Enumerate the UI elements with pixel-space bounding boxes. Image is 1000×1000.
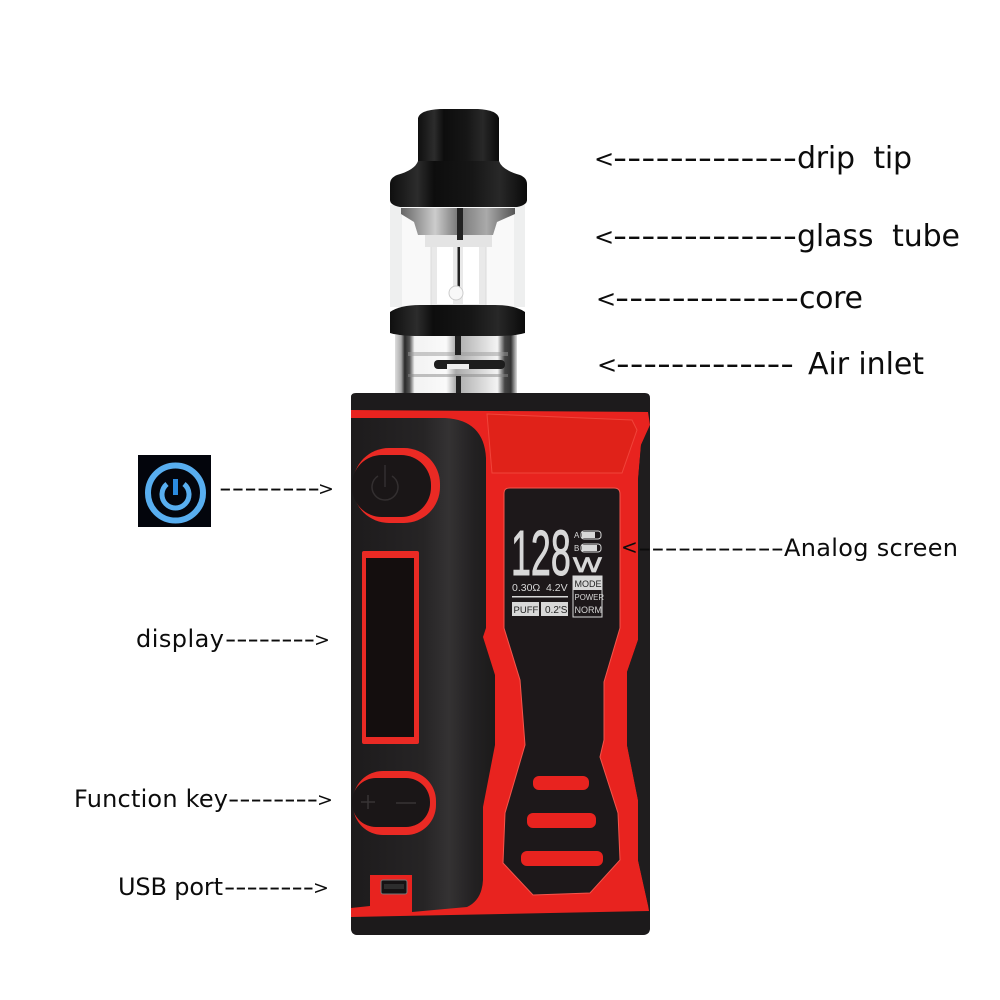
vent bar 3 bbox=[521, 851, 603, 866]
glass tube bbox=[390, 205, 525, 307]
ohm value: 0.30Ω bbox=[512, 582, 540, 594]
analog screen readout bbox=[511, 517, 604, 617]
USB port bbox=[381, 880, 407, 894]
label: USB port: > bbox=[313, 877, 329, 899]
air inlet metal base bbox=[395, 335, 517, 393]
label: display bbox=[136, 625, 330, 653]
label: core bbox=[596, 281, 863, 316]
label: glass tube: < bbox=[594, 223, 614, 251]
right black side strip bbox=[627, 425, 650, 905]
label: glass tube: ------------- bbox=[613, 219, 797, 254]
drip tip bbox=[418, 109, 499, 162]
label: air inlet: < bbox=[597, 351, 617, 379]
label: function key: -------- bbox=[228, 785, 318, 813]
side display window bbox=[362, 551, 419, 744]
label: air inlet bbox=[597, 347, 924, 382]
arrow: power button: -------- bbox=[219, 474, 320, 502]
core ring bbox=[390, 305, 525, 336]
label: glass tube bbox=[594, 219, 960, 254]
red front frame bbox=[351, 410, 650, 917]
arrow: power button bbox=[219, 474, 334, 502]
label: display: -------- bbox=[225, 625, 315, 653]
mode box: POWER bbox=[574, 593, 604, 602]
label: USB port: -------- bbox=[224, 873, 314, 901]
vent bar 2 bbox=[527, 813, 596, 828]
label: drip tip: ------------- bbox=[613, 141, 797, 176]
label: air inlet: ------------- bbox=[616, 347, 794, 382]
mode box: MODE bbox=[574, 579, 602, 589]
top red panel highlight bbox=[487, 414, 637, 473]
icon: blue power symbol bbox=[138, 455, 211, 527]
screen and lower black panel bbox=[503, 488, 620, 895]
label: function key: Function key bbox=[74, 785, 228, 813]
arrow: power button: > bbox=[318, 478, 334, 500]
tank collar bbox=[390, 161, 527, 207]
label: core: ------------- bbox=[615, 281, 799, 316]
bottom black base bbox=[351, 911, 650, 935]
reading 128: 128 bbox=[511, 517, 571, 589]
label: drip tip bbox=[594, 141, 912, 176]
label: display: > bbox=[314, 629, 330, 651]
label: USB port: USB port bbox=[118, 873, 223, 901]
mode box: NORM bbox=[574, 605, 602, 615]
battery indicators: B bbox=[574, 544, 579, 553]
label: air inlet: Air inlet bbox=[808, 347, 924, 382]
label: drip tip: drip tip bbox=[797, 141, 912, 176]
function key bbox=[352, 771, 436, 835]
vent bar 1 bbox=[533, 776, 589, 790]
battery indicators: A bbox=[574, 531, 580, 540]
black shell bbox=[351, 393, 650, 935]
puff chip: PUFF bbox=[514, 605, 538, 616]
label: analog screen: < bbox=[621, 535, 638, 559]
label: USB port bbox=[118, 873, 329, 901]
label: analog screen bbox=[621, 534, 958, 562]
watt symbol: W bbox=[573, 553, 602, 577]
label: analog screen: ----------- bbox=[638, 534, 784, 562]
power button bbox=[352, 448, 440, 523]
battery indicators bbox=[574, 531, 601, 553]
mode box bbox=[573, 576, 604, 617]
leather grip panel bbox=[351, 418, 495, 912]
label: display: display bbox=[136, 625, 224, 653]
label: core: core bbox=[799, 281, 863, 316]
label: glass tube: glass tube bbox=[797, 219, 960, 254]
voltage value: 4.2V bbox=[546, 582, 568, 594]
label: core: < bbox=[596, 285, 616, 313]
label: drip tip: < bbox=[594, 145, 614, 173]
device: tank atomizer bbox=[390, 109, 527, 393]
time chip: 0.2'S bbox=[545, 605, 568, 616]
label: function key bbox=[74, 785, 333, 813]
label: analog screen: Analog screen bbox=[784, 534, 958, 562]
device: box mod body bbox=[351, 393, 650, 935]
label: function key: > bbox=[317, 789, 333, 811]
